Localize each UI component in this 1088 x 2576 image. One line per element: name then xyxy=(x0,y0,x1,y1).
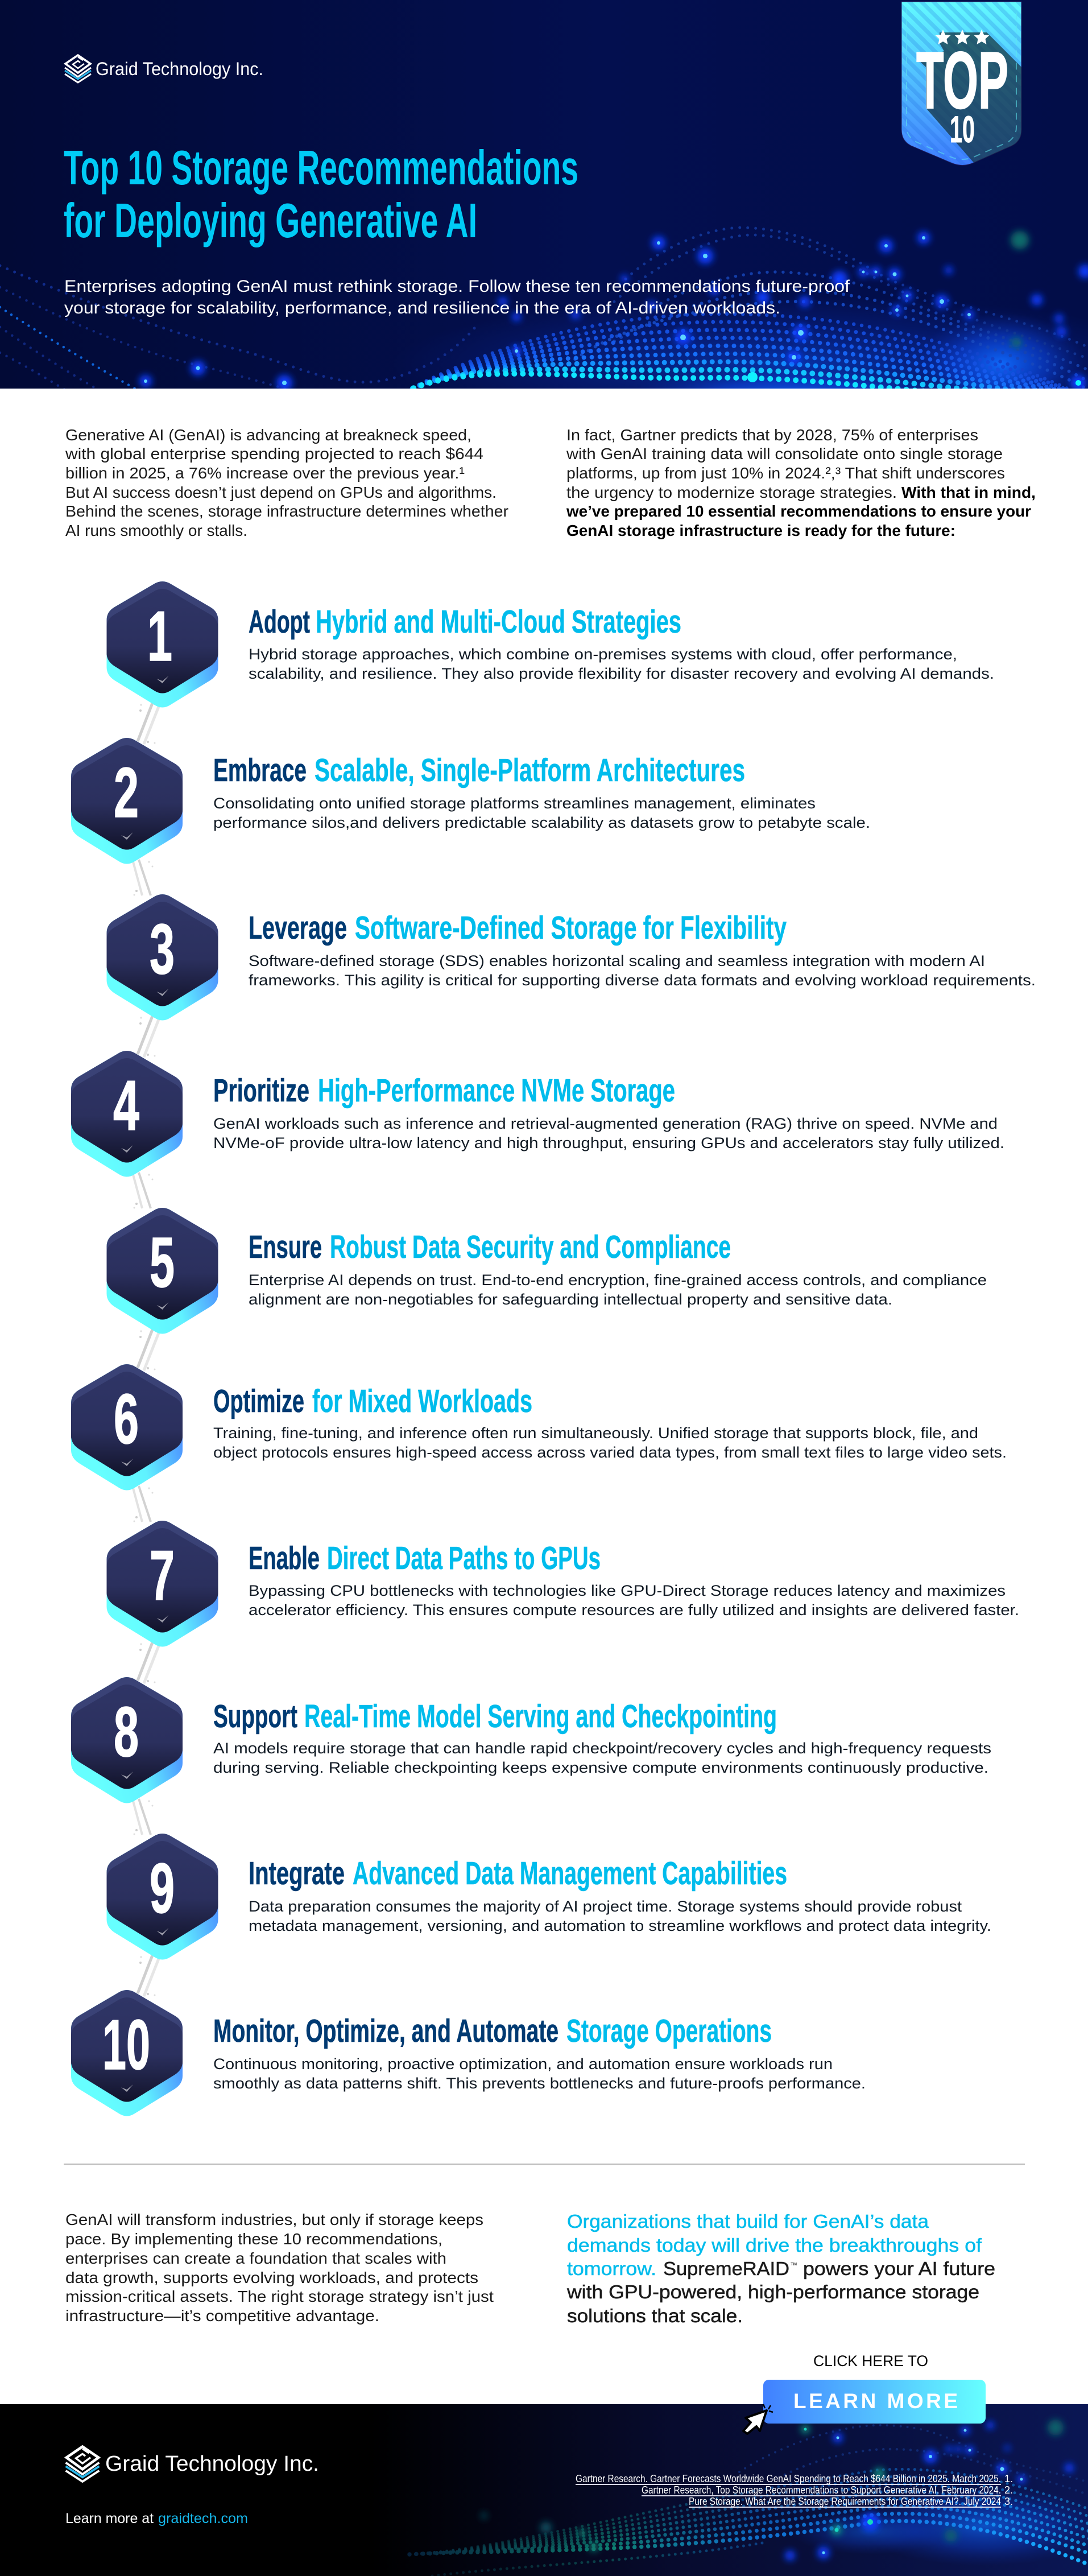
badge: top 10 ribbon xyxy=(901,2,1024,165)
references: 1. xyxy=(1004,2473,1013,2484)
references xyxy=(576,2473,1013,2508)
body 10: smoothly as data patterns shift. This prevents bottlenecks and future-proofs performance. xyxy=(213,2075,866,2092)
heading 4: High-Performance NVMe Storage xyxy=(318,1072,675,1109)
learn more link xyxy=(65,2511,248,2527)
intro text: left column: Behind the scenes, storage infrastructure determines whether xyxy=(65,502,508,520)
icon: hexagon 2: 2 xyxy=(114,754,139,832)
icon: hexagon 1: 1 xyxy=(147,597,172,676)
recommendation 4 xyxy=(71,1051,1004,1176)
heading 1: Adopt xyxy=(249,604,310,640)
connector 8 to 9 xyxy=(133,1799,154,1835)
closing text: left column: mission-critical assets. The right storage strategy isn’t just xyxy=(65,2288,494,2305)
heading 3 xyxy=(249,910,787,946)
logo: Graid Technology footer xyxy=(66,2447,319,2482)
icon: hexagon 9 xyxy=(107,1834,218,1959)
closing callout: right column: tomorrow. xyxy=(567,2258,656,2279)
closing text: left column: pace. By implementing these 10 recommendations, xyxy=(65,2230,442,2248)
heading 1: Hybrid and Multi-Cloud Strategies xyxy=(316,604,681,640)
closing callout: right column: SupremeRAID xyxy=(663,2258,789,2279)
closing text: left column: infrastructure—it’s competitive advantage. xyxy=(65,2307,379,2325)
body 6: Training, fine-tuning, and inference often run simultaneously. Unified storage that supports block, file, and xyxy=(213,1425,978,1442)
connector 3 to 4 xyxy=(138,1016,159,1057)
heading 7 xyxy=(249,1540,601,1576)
closing text: left column: GenAI will transform industries, but only if storage keeps xyxy=(65,2211,483,2228)
subtitle: your storage for scalability, performance, and resilience in the era of AI-driven workloads. xyxy=(64,299,780,317)
intro text: left column: AI runs smoothly or stalls. xyxy=(65,522,247,539)
intro text: right column xyxy=(566,426,1036,539)
body 1 xyxy=(249,646,994,682)
body 2: Consolidating onto unified storage platforms streamlines management, eliminates xyxy=(213,795,816,812)
heading 10: Monitor, Optimize, and Automate xyxy=(213,2013,559,2049)
subtitle xyxy=(64,277,850,317)
closing callout: right column: Organizations that build for GenAI’s data xyxy=(567,2211,929,2232)
body 10: Continuous monitoring, proactive optimization, and automation ensure workloads run xyxy=(213,2055,833,2073)
connector 4 to 5 xyxy=(133,1173,154,1208)
heading 6 xyxy=(213,1383,532,1419)
icon: hexagon 6 xyxy=(71,1364,183,1491)
recommendation 9 xyxy=(107,1834,991,1959)
intro text: right column: With that in mind, xyxy=(901,484,1036,501)
heading 4: Prioritize xyxy=(213,1072,309,1109)
references: 3. xyxy=(1004,2496,1013,2507)
recommendation 1 xyxy=(107,581,994,708)
icon: hexagon 7 xyxy=(107,1521,218,1646)
recommendation 10 xyxy=(71,1990,866,2116)
icon: hexagon 7: 7 xyxy=(150,1537,175,1615)
connector 6 to 7 xyxy=(133,1486,154,1522)
connector 5 to 6 xyxy=(138,1330,159,1370)
intro text: right column: the urgency to modernize storage strategies. xyxy=(566,484,897,501)
icon: hexagon 4 xyxy=(71,1051,183,1176)
body 7 xyxy=(249,1582,1019,1619)
intro text: right column: with GenAI training data will consolidate onto single storage xyxy=(566,445,1003,463)
recommendation 7 xyxy=(107,1521,1019,1646)
button: learn more xyxy=(763,2380,986,2424)
closing callout: right column: solutions that scale. xyxy=(567,2305,743,2326)
connector 9 to 10 xyxy=(138,1955,159,1996)
heading 1 xyxy=(249,604,681,640)
icon: hexagon 3: 3 xyxy=(150,910,175,989)
badge: top 10 ribbon: TOP xyxy=(916,35,1008,126)
body 10 xyxy=(213,2055,866,2092)
recommendation 3 xyxy=(107,894,1036,1021)
heading 5: Ensure xyxy=(249,1229,322,1265)
icon: hexagon 3 xyxy=(107,894,218,1021)
connector 7 to 8 xyxy=(138,1642,159,1683)
heading 5 xyxy=(249,1229,731,1265)
logo: Graid Technology footer: Graid Technology Inc. xyxy=(105,2452,319,2476)
closing callout: right column: ™ xyxy=(790,2261,797,2269)
heading 8 xyxy=(213,1698,777,1735)
closing callout: right column: demands today will drive the breakthroughs of xyxy=(567,2235,982,2256)
references: Gartner Research, Top Storage Recommendations to Support Generative AI. February 2024. xyxy=(642,2484,1001,2496)
learn more link: Learn more at xyxy=(65,2511,154,2527)
recommendation 8 xyxy=(71,1677,991,1803)
heading 7: Direct Data Paths to GPUs xyxy=(327,1540,601,1576)
body 9 xyxy=(249,1898,991,1934)
body 6 xyxy=(213,1425,1007,1461)
body 5: alignment are non-negotiables for safeguarding intellectual property and sensitive data. xyxy=(249,1291,892,1308)
heading 6: for Mixed Workloads xyxy=(312,1383,532,1419)
title xyxy=(64,141,578,248)
intro text: right column: GenAI storage infrastructure is ready for the future: xyxy=(566,522,955,539)
heading 3: Leverage xyxy=(249,910,347,946)
heading 8: Support xyxy=(213,1698,297,1735)
intro text: left column: billion in 2025, a 76% increase over the previous year.¹ xyxy=(65,464,465,482)
closing callout: right column xyxy=(566,2211,995,2326)
icon: hexagon 5 xyxy=(107,1208,218,1334)
heading 2 xyxy=(213,752,745,789)
connector 2 to 3 xyxy=(133,860,154,895)
button: learn more: LEARN MORE xyxy=(793,2389,958,2413)
icon: hexagon 8 xyxy=(71,1677,183,1803)
intro text: right column: In fact, Gartner predicts that by 2028, 75% of enterprises xyxy=(566,426,978,444)
heading 2: Embrace xyxy=(213,752,307,789)
logo: Graid Technology xyxy=(65,55,263,82)
badge: top 10 ribbon: 10 xyxy=(950,108,975,150)
header banner xyxy=(0,0,1088,389)
closing callout: right column: with GPU-powered, high-performance storage xyxy=(566,2281,979,2302)
closing callout: right column: powers your AI future xyxy=(803,2258,995,2279)
heading 10: Storage Operations xyxy=(566,2013,772,2049)
body 3: Software-defined storage (SDS) enables horizontal scaling and seamless integration with modern AI xyxy=(249,952,985,969)
body 4: NVMe-oF provide ultra-low latency and high throughput, ensuring GPUs and accelerators stay fully utilized. xyxy=(213,1134,1004,1151)
body 1: Hybrid storage approaches, which combine on-premises systems with cloud, offer performance, xyxy=(249,646,957,663)
body 9: Data preparation consumes the majority of AI project time. Storage systems should provide robust xyxy=(249,1898,962,1915)
intro text: left column: But AI success doesn’t just depend on GPUs and algorithms. xyxy=(65,484,497,501)
heading 9: Advanced Data Management Capabilities xyxy=(353,1855,787,1892)
footer banner xyxy=(0,2404,1088,2576)
icon: hexagon 5: 5 xyxy=(150,1224,175,1302)
heading 9 xyxy=(249,1855,787,1892)
recommendation 5 xyxy=(107,1208,987,1334)
icon: cursor xyxy=(743,2404,773,2434)
body 6: object protocols ensures high-speed access across varied data types, from small text files to large video sets. xyxy=(213,1444,1007,1461)
subtitle: Enterprises adopting GenAI must rethink storage. Follow these ten recommendations future-proof xyxy=(64,277,850,296)
closing text: left column: data growth, supports evolving workloads, and protects xyxy=(65,2269,478,2286)
body 4 xyxy=(213,1115,1004,1151)
closing text: left column xyxy=(65,2211,494,2325)
logo: Graid Technology: Graid Technology Inc. xyxy=(96,59,263,79)
icon: hexagon 9: 9 xyxy=(150,1850,175,1928)
recommendation 2 xyxy=(71,738,870,864)
icon: hexagon 2 xyxy=(71,738,183,864)
icon: hexagon 4: 4 xyxy=(113,1067,139,1145)
icon: hexagon 1 xyxy=(107,581,218,708)
references: Gartner Research. Gartner Forecasts Worldwide GenAI Spending to Reach $644 Billion in 2025. March 2025. xyxy=(576,2473,1001,2484)
recommendation 6 xyxy=(71,1364,1007,1491)
body 1: scalability, and resilience. They also provide flexibility for disaster recovery and evolving AI demands. xyxy=(249,665,994,682)
icon: hexagon 8: 8 xyxy=(114,1693,139,1772)
heading 3: Software-Defined Storage for Flexibility xyxy=(355,910,787,946)
intro text: left column xyxy=(65,426,508,539)
heading 5: Robust Data Security and Compliance xyxy=(330,1229,731,1265)
body 9: metadata management, versioning, and automation to streamline workflows and protect data integrity. xyxy=(249,1917,991,1934)
body 2: performance silos,and delivers predictable scalability as datasets grow to petabyte scale. xyxy=(213,814,870,831)
icon: hexagon 10 xyxy=(71,1990,183,2116)
body 3: frameworks. This agility is critical for supporting diverse data formats and evolving workload requirements. xyxy=(249,972,1036,989)
intro text: left column: with global enterprise spending projected to reach $644 xyxy=(65,445,483,463)
title: for Deploying Generative AI xyxy=(64,194,477,248)
icon: hexagon 10: 10 xyxy=(102,2006,150,2084)
intro text: right column: platforms, up from just 10% in 2024.²,³ That shift underscores xyxy=(566,464,1005,482)
body 5 xyxy=(249,1272,987,1308)
heading 6: Optimize xyxy=(213,1383,304,1419)
references: 2. xyxy=(1004,2484,1013,2496)
learn more link: graidtech.com xyxy=(158,2511,248,2527)
body 7: accelerator efficiency. This ensures compute resources are fully utilized and insights are delivered faster. xyxy=(249,1601,1019,1619)
closing text: left column: enterprises can create a foundation that scales with xyxy=(65,2249,446,2267)
heading 4 xyxy=(213,1072,675,1109)
intro text: left column: Generative AI (GenAI) is advancing at breakneck speed, xyxy=(65,426,471,444)
body 8: during serving. Reliable checkpointing keeps expensive compute environments continuously productive. xyxy=(213,1759,988,1776)
call to action label: CLICK HERE TO xyxy=(813,2352,928,2369)
body 8 xyxy=(213,1740,991,1776)
heading 8: Real-Time Model Serving and Checkpointing xyxy=(304,1698,777,1735)
body 4: GenAI workloads such as inference and retrieval-augmented generation (RAG) thrive on speed. NVMe and xyxy=(213,1115,998,1132)
body 8: AI models require storage that can handle rapid checkpoint/recovery cycles and high-frequency requests xyxy=(213,1740,991,1757)
connector 1 to 2 xyxy=(138,703,159,744)
intro text: right column: we’ve prepared 10 essential recommendations to ensure your xyxy=(566,502,1031,520)
references: Pure Storage. What Are the Storage Requirements for Generative AI?. July 2024 xyxy=(689,2496,1001,2507)
heading 2: Scalable, Single-Platform Architectures xyxy=(315,752,745,789)
heading 7: Enable xyxy=(249,1540,320,1576)
body 5: Enterprise AI depends on trust. End-to-end encryption, fine-grained access controls, and compliance xyxy=(249,1272,987,1289)
body 7: Bypassing CPU bottlenecks with technologies like GPU-Direct Storage reduces latency and maximizes xyxy=(249,1582,1006,1599)
title: Top 10 Storage Recommendations xyxy=(64,141,578,195)
body 2 xyxy=(213,795,870,831)
body 3 xyxy=(249,952,1036,989)
heading 9: Integrate xyxy=(249,1855,345,1892)
icon: hexagon 6: 6 xyxy=(114,1380,139,1459)
